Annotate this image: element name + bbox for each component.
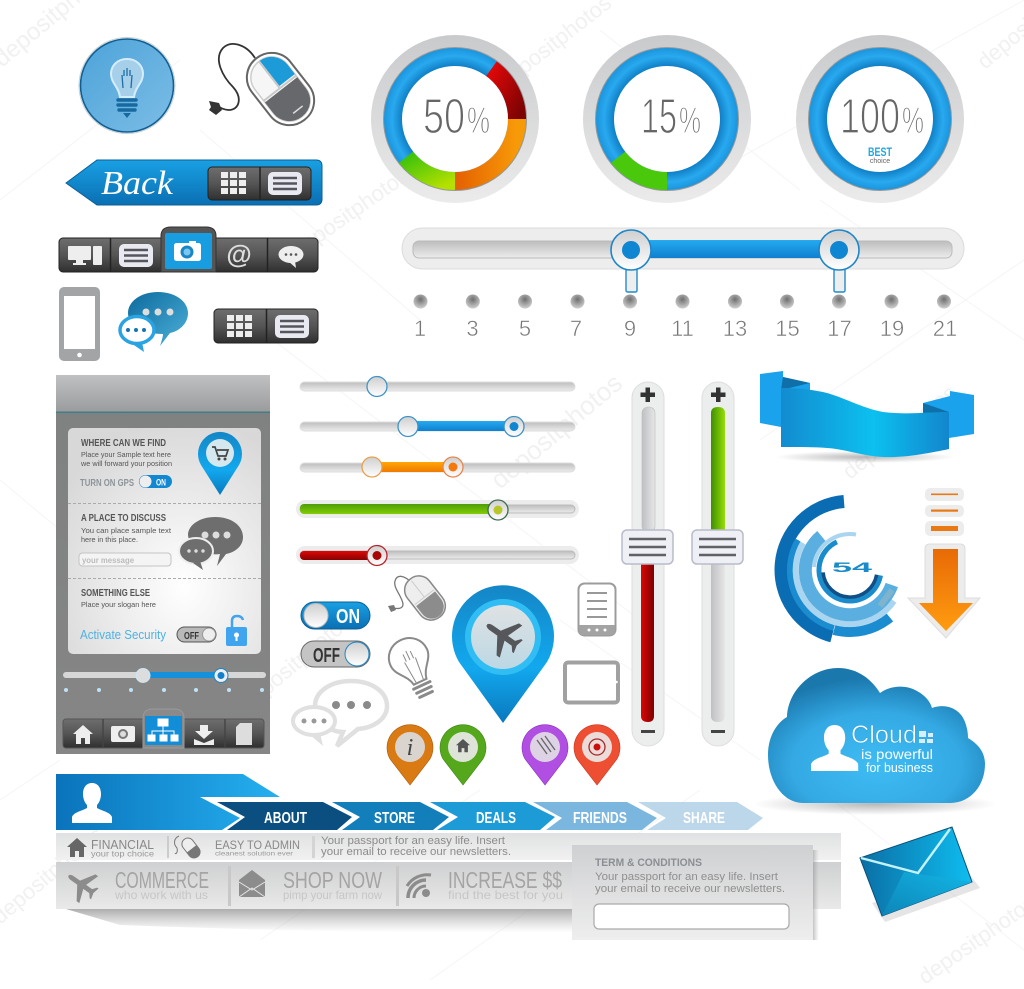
toggle: security off (177, 627, 216, 642)
value: % (902, 100, 924, 141)
text: financial: your top choice (91, 850, 155, 858)
toolbar with camera tab (59, 227, 318, 272)
text: easy to admin: EASY TO ADMIN (215, 838, 300, 852)
text: shop now: pimp your farm now (283, 888, 382, 902)
chevron nav (56, 774, 763, 830)
icon: hierarchy (148, 719, 178, 741)
pin: plane (452, 585, 554, 723)
panel: terms and conditions: Your passport for an easy life. Insert (595, 871, 778, 883)
gauge: 100% best choice (796, 35, 964, 203)
icon: ebook reader (578, 584, 616, 636)
icon: home (73, 725, 93, 744)
best choice label: BEST (868, 147, 892, 159)
text block: where can we find: Place your Sample text here (81, 450, 171, 459)
right handle (819, 230, 859, 292)
slider: blue range (300, 416, 575, 436)
chart: radial progress 54 (781, 502, 894, 636)
value: 100 (840, 90, 900, 144)
toggle: off (301, 641, 370, 667)
chevron: friends: FRIENDS (573, 810, 627, 827)
ribbon banner (760, 371, 974, 463)
scale numbers: 7 (570, 316, 582, 341)
segmented buttons: small grid and list (214, 309, 318, 343)
chevron: about (217, 802, 352, 830)
pin: target (574, 725, 620, 785)
value: % (467, 100, 490, 141)
scale numbers: 15 (775, 316, 800, 341)
text block: a place to discuss: here in this place. (81, 535, 138, 544)
value: 54 (832, 559, 873, 575)
label: activate security: Activate Security (80, 628, 167, 642)
input: your message: your message (82, 556, 135, 565)
toggle: on: ON (336, 606, 360, 628)
range slider with scale (402, 228, 964, 341)
text block: something else: Place your slogan here (81, 600, 156, 609)
slider handle (622, 530, 673, 564)
icon: download (194, 725, 214, 745)
bar: commerce strip (56, 862, 841, 933)
arrow: download with steps (908, 488, 980, 638)
panel: terms and conditions: your email to receive our newsletters. (595, 883, 785, 895)
pin: cart (198, 432, 242, 495)
text: depositphotos (485, 368, 628, 495)
toggle: security off: OFF (184, 631, 199, 642)
slider: gray (300, 376, 575, 396)
icon: lightbulb badge (79, 38, 175, 134)
segmented buttons: grid and list (208, 167, 311, 200)
scale numbers (414, 316, 957, 341)
back label: Back (101, 165, 174, 202)
icon: small gray mouse (388, 570, 451, 626)
text: increase: find the best for you (448, 888, 563, 902)
scale numbers: 9 (624, 316, 636, 341)
sliders group (296, 376, 579, 566)
email input (594, 904, 789, 929)
value: % (679, 100, 701, 141)
text block: a place to discuss (81, 512, 172, 544)
icon: gray chat bubbles (179, 517, 243, 570)
text: financial: FINANCIAL (91, 837, 154, 852)
text: shop now (283, 867, 382, 902)
text: commerce: who work with us (114, 888, 208, 902)
chevron: about: ABOUT (264, 810, 307, 827)
icon: light gray chat bubbles (293, 681, 387, 746)
cloud text: is powerful (861, 746, 933, 762)
scale numbers: 3 (466, 316, 479, 341)
icon: blue chat bubbles (120, 292, 188, 352)
cloud text (851, 721, 933, 775)
chevron: share (638, 802, 763, 830)
pin: info (387, 725, 433, 785)
value: 50 (423, 90, 465, 144)
vertical slider: green (692, 382, 743, 746)
text block: where can we find (80, 437, 172, 489)
text: depositphotos (235, 609, 356, 716)
text: easy to admin: cleanest solution ever (215, 850, 294, 858)
back button (66, 160, 322, 205)
text: commerce: COMMERCE (115, 867, 209, 893)
icon: speech bubble (278, 246, 304, 268)
icon: user (811, 725, 858, 771)
slider: green (296, 500, 579, 520)
pin: menu (522, 725, 568, 785)
scale numbers: 17 (827, 316, 852, 341)
best choice label: choice (870, 158, 890, 165)
icon: gray lightbulb (383, 632, 444, 703)
gauge: 15% (583, 35, 751, 203)
app tab bar (63, 709, 264, 748)
icon: document (236, 723, 252, 745)
text: easy to admin (215, 838, 300, 858)
text: newsletter: your email to receive our newsletters. (321, 846, 511, 858)
text: depositphotos (838, 380, 961, 484)
icon: camera (174, 241, 201, 261)
chevron: store (332, 802, 449, 830)
text: shop now: SHOP NOW (283, 867, 382, 893)
header arrow (56, 774, 280, 830)
text block: a place to discuss: You can place sample text (81, 526, 172, 535)
text block: something else (81, 587, 156, 609)
pin: info: i (407, 735, 413, 761)
icon: user (72, 783, 112, 823)
scale numbers: 19 (880, 316, 904, 341)
icon: wifi (407, 875, 431, 898)
chevron: deals (430, 802, 555, 830)
gauge: 50% (371, 35, 539, 203)
toggle: GPS on: ON (156, 478, 166, 488)
card (68, 428, 261, 654)
scale numbers: 11 (671, 316, 694, 341)
text: financial (91, 837, 155, 858)
scale dots (414, 294, 951, 308)
panel: terms and conditions: TERM & CONDITIONS (595, 857, 702, 869)
icon: computer mouse with cable (209, 43, 316, 126)
icon: at sign: @ (226, 239, 252, 269)
icon: tablet (565, 662, 618, 702)
vertical slider: red (622, 382, 673, 746)
slider handle (692, 530, 743, 564)
scale numbers: 1 (414, 316, 426, 341)
text block: where can we find: TURN ON GPS (80, 477, 134, 489)
icon: plane (59, 862, 104, 907)
icon: open padlock (226, 616, 247, 646)
icon: envelope (239, 870, 265, 897)
panel: terms and conditions (572, 845, 819, 940)
left handle (611, 230, 651, 292)
text block: where can we find: we will forward your position (80, 459, 172, 468)
icon: home (67, 838, 87, 857)
cloud text: for business (866, 760, 933, 775)
text: increase: INCREASE $$ (448, 867, 562, 893)
text block: a place to discuss: A PLACE TO DISCUSS (81, 512, 166, 524)
chevron: friends (533, 802, 657, 830)
text: commerce (114, 867, 209, 902)
chevron: share: SHARE (683, 810, 725, 827)
text: newsletter (321, 835, 511, 858)
cloud text: Cloud (851, 721, 917, 749)
icon: envelope (860, 827, 980, 922)
value: 15 (641, 90, 677, 144)
icon: desktop computer (68, 246, 102, 265)
icon: mouse (175, 836, 203, 860)
toggle: on (301, 602, 370, 629)
scale numbers: 21 (933, 316, 957, 341)
panel: mobile app screen (56, 375, 270, 754)
pin: home (440, 725, 486, 785)
text: depositphotos (287, 163, 413, 262)
cloud badge (753, 668, 997, 815)
chevron: deals: DEALS (476, 810, 516, 827)
scale numbers: 5 (519, 316, 531, 341)
text block: something else: SOMETHING ELSE (81, 587, 150, 599)
toggle: GPS on (139, 475, 172, 488)
chevron: store: STORE (374, 810, 415, 827)
text: increase (448, 867, 563, 902)
input: your message (79, 553, 171, 566)
best choice label (868, 147, 892, 165)
scale numbers: 13 (723, 316, 747, 341)
icon: smartphone (59, 287, 100, 361)
icon: camera (111, 726, 135, 742)
text: newsletter: Your passport for an easy life. Insert (321, 835, 505, 847)
text block: where can we find: WHERE CAN WE FIND (81, 437, 166, 449)
app slider (63, 668, 266, 692)
slider: orange range (300, 457, 575, 477)
slider: red (296, 546, 579, 566)
bar: light info strip (56, 833, 841, 860)
toggle: off: OFF (313, 645, 340, 667)
